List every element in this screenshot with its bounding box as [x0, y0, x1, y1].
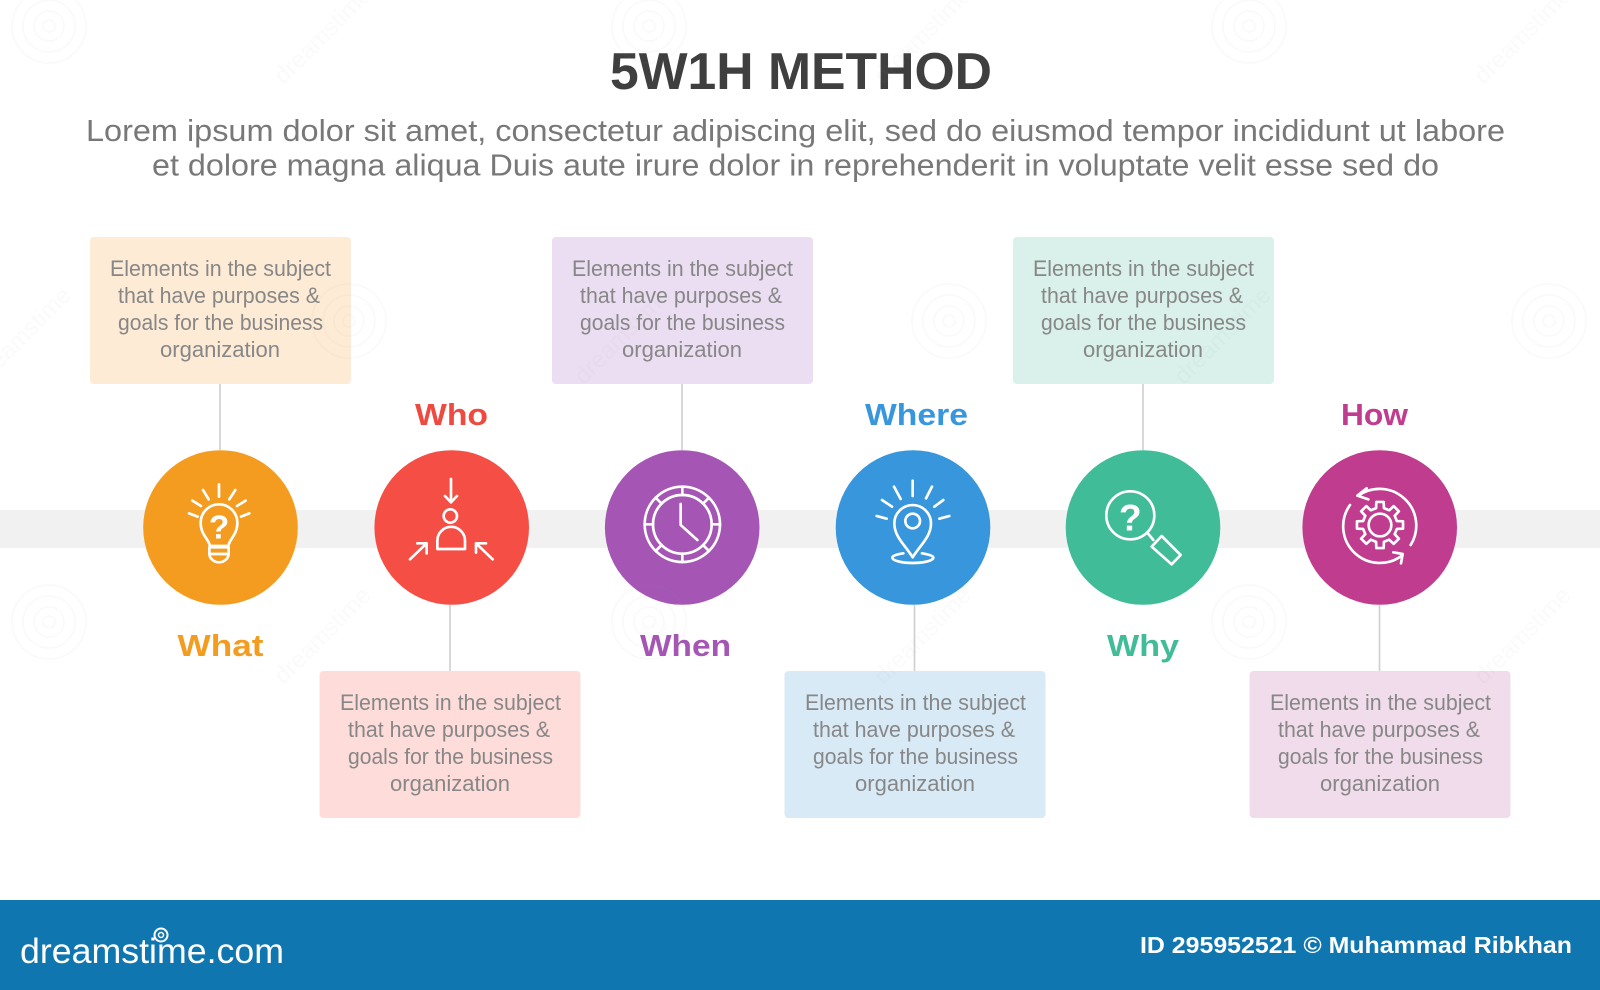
- panel: who description: [320, 671, 580, 818]
- panel: how description: Elements in the subject: [1270, 690, 1491, 715]
- subtitle text: et dolore magna aliqua Duis aute irure dolor in reprehenderit in voluptate velit esse sed do: [152, 148, 1439, 182]
- title: 5W1H METHOD: [610, 43, 992, 101]
- watermark pattern: dreamstime: [1469, 582, 1577, 690]
- label: how: How: [1341, 397, 1409, 432]
- icon: person with arrows: [410, 479, 493, 559]
- circle: when: [605, 450, 760, 605]
- panel: who description: that have purposes &: [348, 717, 550, 742]
- panel: what description: Elements in the subject: [110, 256, 331, 281]
- panel: when description: Elements in the subject: [572, 256, 793, 281]
- watermark pattern: dreamstime: [569, 282, 677, 390]
- panel: when description: [552, 237, 813, 384]
- watermark pattern: dreamstime: [869, 582, 977, 690]
- icon: gear with rotating arrows: [1343, 488, 1416, 563]
- panel: who description: organization: [390, 771, 510, 796]
- circle: who: [374, 450, 529, 605]
- label: why: Why: [1107, 628, 1180, 663]
- circle: what: [143, 450, 298, 605]
- panel: how description: that have purposes &: [1278, 717, 1480, 742]
- subtitle text: Lorem ipsum dolor sit amet, consectetur adipiscing elit, sed do eiusmod tempor incididunt ut labore: [86, 113, 1505, 148]
- panel: what description: that have purposes &: [118, 283, 320, 308]
- footer bar: [0, 900, 1600, 990]
- panel: why description: organization: [1083, 337, 1203, 362]
- panel: who description: Elements in the subject: [340, 690, 561, 715]
- watermark pattern: dreamstime: [269, 582, 377, 690]
- panel: where description: organization: [855, 771, 975, 796]
- footer logo: dreamstime.com: [20, 932, 284, 971]
- panel: where description: goals for the business: [813, 744, 1018, 769]
- panel: when description: goals for the business: [580, 310, 785, 335]
- icon: light bulb with question mark: ?: [209, 509, 229, 546]
- icon: light bulb with question mark: [189, 484, 249, 562]
- watermark pattern: dreamstime: [1169, 282, 1277, 390]
- connector lines: [220, 384, 1380, 671]
- circle: where: [836, 450, 990, 605]
- label: what: What: [178, 628, 264, 663]
- icon: clock: [645, 487, 720, 562]
- panel: when description: that have purposes &: [580, 283, 782, 308]
- panel: why description: Elements in the subject: [1033, 256, 1254, 281]
- icon: magnifier with question mark: [1106, 491, 1181, 564]
- icon: location pin with rays: [877, 481, 949, 563]
- panel: where description: Elements in the subject: [805, 690, 1026, 715]
- label: when: When: [640, 628, 731, 663]
- panel: how description: organization: [1320, 771, 1440, 796]
- panel: what description: goals for the business: [118, 310, 323, 335]
- panel: where description: [784, 671, 1046, 818]
- panel: who description: goals for the business: [348, 744, 553, 769]
- panel: how description: goals for the business: [1278, 744, 1483, 769]
- timeline band: [0, 510, 1600, 548]
- panel: when description: organization: [622, 337, 742, 362]
- label: where: Where: [865, 397, 968, 432]
- panel: what description: organization: [160, 337, 280, 362]
- label: who: Who: [415, 397, 488, 432]
- panel: why description: that have purposes &: [1041, 283, 1243, 308]
- circle: why: [1066, 450, 1220, 605]
- panel: how description: [1250, 671, 1510, 818]
- circle: how: [1302, 450, 1457, 605]
- panel: what description: [90, 237, 351, 384]
- icon: magnifier with question mark: ?: [1119, 497, 1142, 539]
- watermark pattern: [0, 0, 1586, 690]
- panel: why description: goals for the business: [1041, 310, 1246, 335]
- panel: why description: [1013, 237, 1274, 384]
- footer credit: ID 295952521 © Muhammad Ribkhan: [1140, 932, 1572, 958]
- subtitle text: [86, 113, 1505, 182]
- panel: where description: that have purposes &: [813, 717, 1015, 742]
